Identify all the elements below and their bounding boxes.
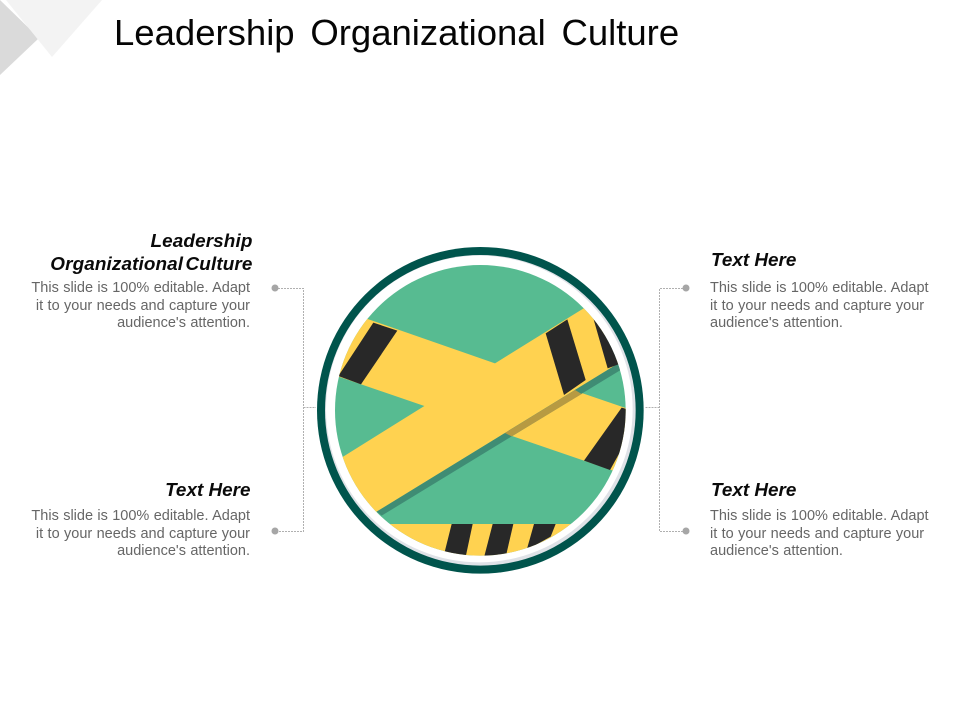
text: This slide is 100% editable. Adapt xyxy=(710,508,929,524)
text block: top left: Organizational Culture xyxy=(50,254,252,275)
text: audience's attention. xyxy=(117,543,250,559)
text block: bottom right: Text Here xyxy=(711,480,796,501)
text: audience's attention. xyxy=(710,543,843,559)
central circle illustration xyxy=(317,247,644,574)
decorative corner triangles xyxy=(0,0,102,75)
text: This slide is 100% editable. Adapt xyxy=(31,508,250,524)
text: it to your needs and capture your xyxy=(710,298,924,314)
text block: top right: Text Here xyxy=(711,250,796,271)
text block: bottom left: Text Here xyxy=(165,480,250,501)
text: it to your needs and capture your xyxy=(710,526,924,542)
text block: top left xyxy=(50,231,252,275)
text: it to your needs and capture your xyxy=(36,298,250,314)
text: This slide is 100% editable. Adapt xyxy=(31,280,250,296)
text block: top left: Leadership xyxy=(151,231,252,252)
text: audience's attention. xyxy=(117,315,250,331)
title: Leadership Organizational Culture xyxy=(114,12,679,53)
text: it to your needs and capture your xyxy=(36,526,250,542)
text: audience's attention. xyxy=(710,315,843,331)
text: This slide is 100% editable. Adapt xyxy=(710,280,929,296)
